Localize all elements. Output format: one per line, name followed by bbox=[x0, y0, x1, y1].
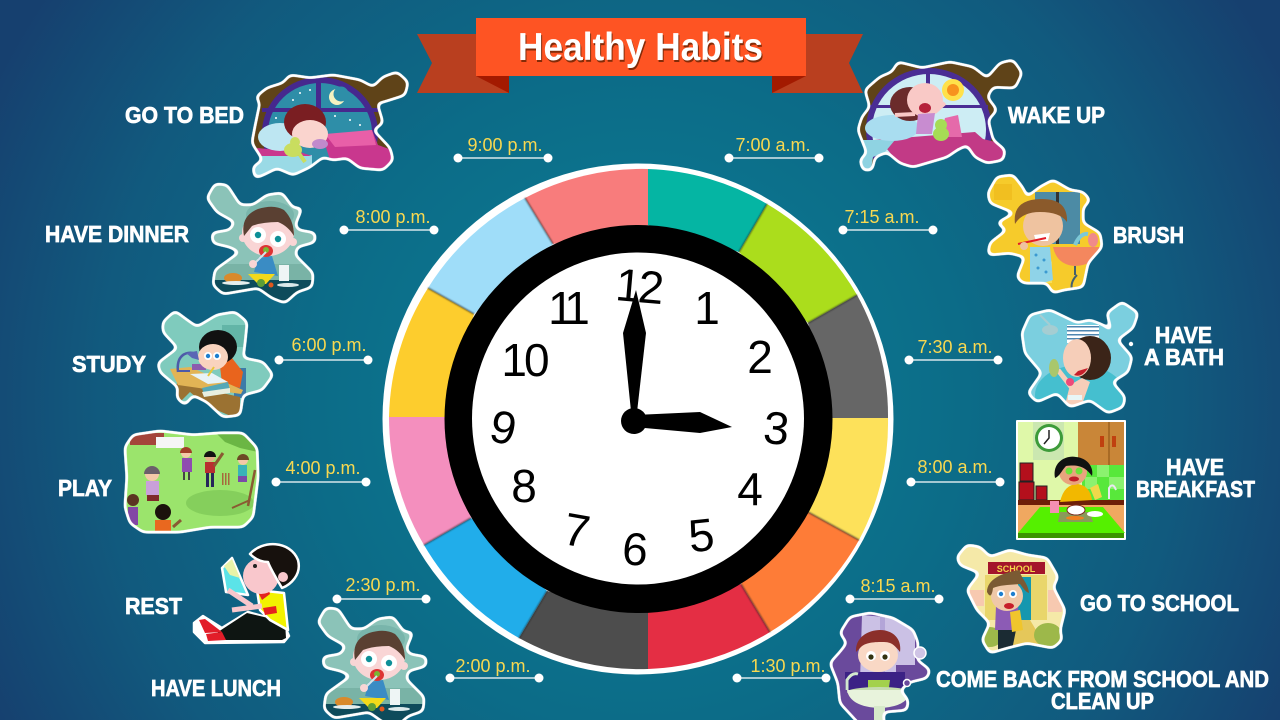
time label: 8:00 p.m.: 8:00 p.m. bbox=[355, 207, 431, 227]
time label: 8:15 a.m. bbox=[846, 576, 944, 604]
label: go to school: GO TO SCHOOL bbox=[1080, 590, 1239, 616]
illustration: play bbox=[124, 430, 260, 534]
label: come back from school and clean up: CLEAN UP bbox=[1051, 688, 1154, 714]
illustration: go to school: SCHOOL bbox=[997, 564, 1036, 574]
time label: 6:00 p.m.: 6:00 p.m. bbox=[291, 335, 367, 355]
label: have lunch: HAVE LUNCH bbox=[151, 675, 281, 701]
time label: 9:00 p.m.: 9:00 p.m. bbox=[467, 135, 543, 155]
clock numbers: 5 bbox=[686, 508, 717, 562]
time label: 7:30 a.m. bbox=[904, 337, 1002, 364]
clock face bbox=[444, 225, 832, 613]
illustration: rest bbox=[194, 544, 299, 643]
illustration: brush bbox=[986, 174, 1104, 294]
illustration: come back from school and clean up bbox=[830, 612, 930, 720]
clock numbers: 9 bbox=[485, 399, 521, 455]
label: have a bath: A BATH bbox=[1144, 344, 1224, 370]
clock hands bbox=[621, 290, 732, 434]
time label: 1:30 p.m. bbox=[732, 656, 830, 682]
time label: 4:00 p.m.: 4:00 p.m. bbox=[285, 458, 361, 478]
clock numbers: 1 bbox=[694, 282, 720, 334]
time label: 9:00 p.m. bbox=[454, 135, 552, 162]
illustration: go to school bbox=[956, 544, 1066, 654]
label: have a bath: HAVE bbox=[1155, 322, 1212, 348]
time label: 7:00 a.m.: 7:00 a.m. bbox=[735, 135, 811, 155]
label: come back from school and clean up bbox=[936, 666, 1269, 714]
clock numbers: 10 bbox=[501, 334, 548, 386]
clock numbers: 3 bbox=[761, 401, 791, 455]
illustration: have breakfast bbox=[1016, 420, 1126, 540]
time label: 8:00 p.m. bbox=[340, 207, 438, 234]
time label: 2:30 p.m.: 2:30 p.m. bbox=[345, 575, 421, 595]
illustration: have dinner bbox=[200, 180, 320, 306]
label: brush: BRUSH bbox=[1113, 222, 1184, 248]
label: rest: REST bbox=[125, 593, 182, 619]
label: have a bath bbox=[1144, 322, 1224, 370]
clock numbers: 11 bbox=[548, 282, 588, 334]
time label: 7:15 a.m.: 7:15 a.m. bbox=[844, 207, 920, 227]
title ribbon: Healthy Habits bbox=[518, 26, 763, 69]
time label: 8:00 a.m.: 8:00 a.m. bbox=[917, 457, 993, 477]
time label: 1:30 p.m.: 1:30 p.m. bbox=[750, 656, 826, 676]
clock numbers: 8 bbox=[511, 460, 537, 512]
time label: 2:00 p.m. bbox=[446, 656, 544, 682]
label: wake up: WAKE UP bbox=[1008, 102, 1105, 128]
label: have breakfast: BREAKFAST bbox=[1136, 476, 1255, 502]
time label: 4:00 p.m. bbox=[272, 458, 370, 486]
clock wheel with coloured segments bbox=[382, 164, 894, 674]
time label: 7:15 a.m. bbox=[838, 207, 938, 234]
time label: 6:00 p.m. bbox=[274, 335, 372, 364]
time label: 2:00 p.m.: 2:00 p.m. bbox=[455, 656, 531, 676]
illustration: go to bed bbox=[250, 71, 409, 178]
clock numbers bbox=[485, 258, 791, 576]
illustration: have lunch bbox=[311, 604, 431, 720]
label: play: PLAY bbox=[58, 475, 112, 501]
time label: 8:00 a.m. bbox=[906, 457, 1004, 486]
clock numbers: 7 bbox=[560, 502, 594, 558]
time label: 8:15 a.m.: 8:15 a.m. bbox=[860, 576, 936, 596]
title ribbon bbox=[417, 18, 863, 93]
label: have breakfast bbox=[1136, 454, 1255, 502]
illustration: study bbox=[157, 310, 274, 418]
clock numbers: 6 bbox=[621, 522, 650, 576]
label: go to bed: GO TO BED bbox=[125, 102, 244, 128]
clock numbers: 12 bbox=[614, 258, 665, 314]
time label: 2:30 p.m. bbox=[332, 575, 430, 604]
label: study: STUDY bbox=[72, 351, 146, 377]
clock numbers: 2 bbox=[747, 331, 773, 383]
illustration: wake up bbox=[857, 59, 1023, 172]
time label: 7:30 a.m.: 7:30 a.m. bbox=[917, 337, 993, 357]
label: have breakfast: HAVE bbox=[1166, 454, 1224, 480]
time label: 7:00 a.m. bbox=[724, 135, 824, 162]
clock numbers: 4 bbox=[737, 463, 763, 515]
illustration: have a bath bbox=[1020, 302, 1138, 414]
label: have dinner: HAVE DINNER bbox=[45, 221, 189, 247]
